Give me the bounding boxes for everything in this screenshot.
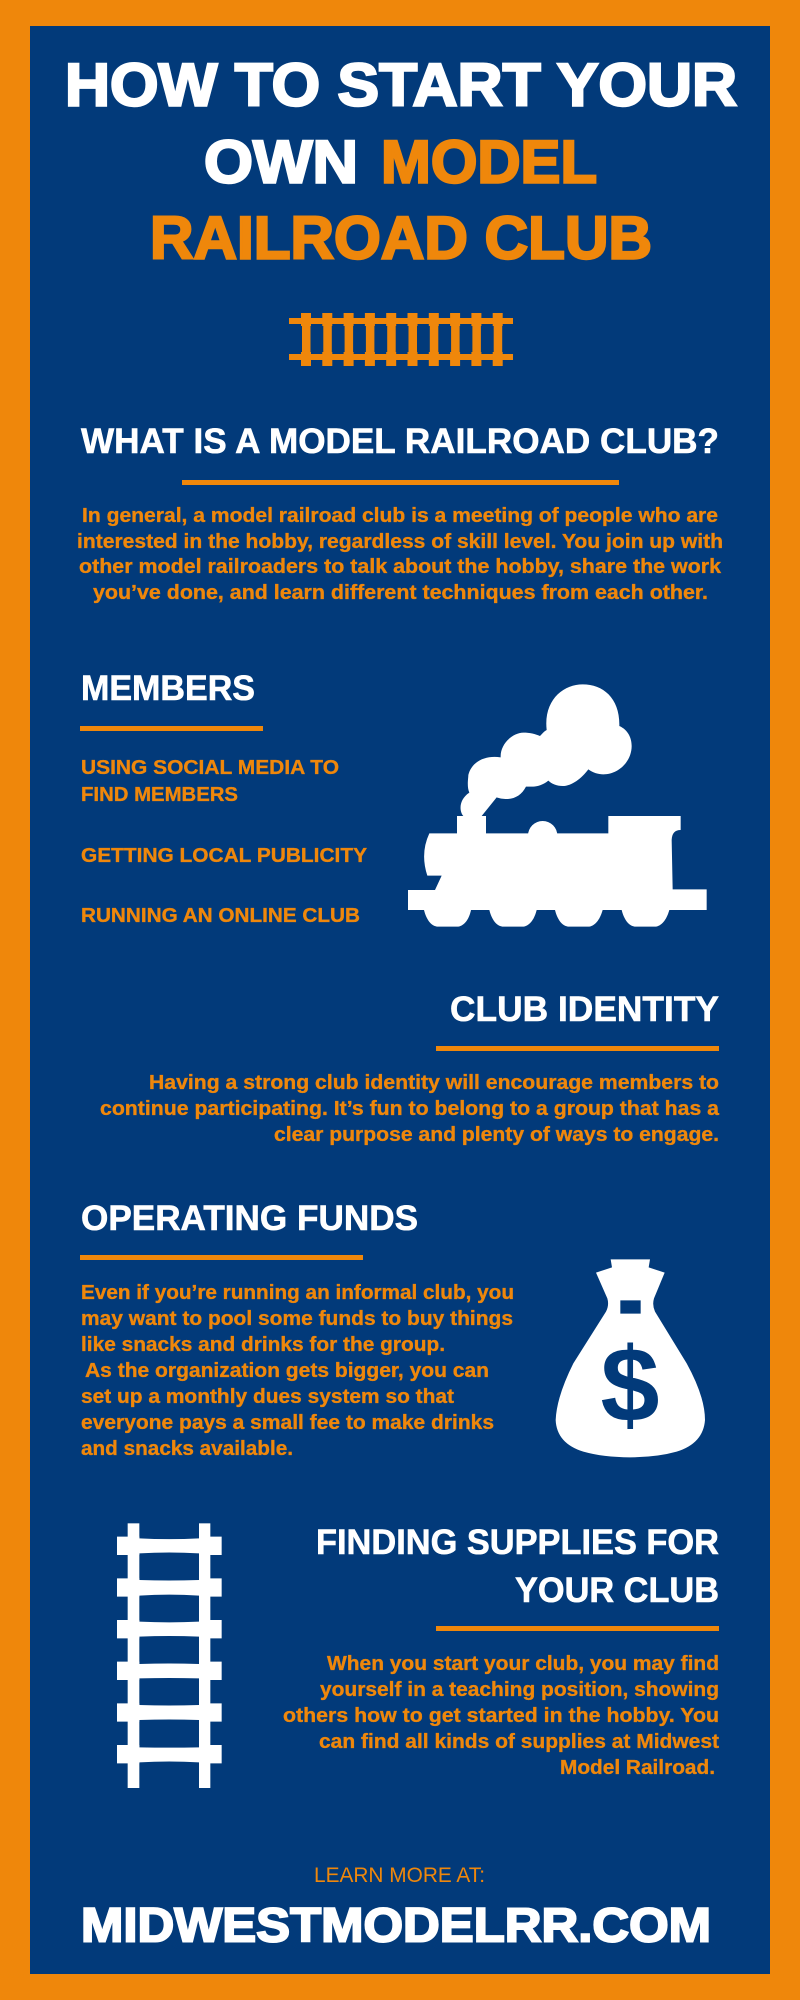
club identity paragraph: clear purpose and plenty of ways to engage. [274,1123,719,1146]
title: OWN [204,128,358,196]
heading: finding supplies for your club [316,1523,719,1610]
heading underline [436,1046,719,1051]
members list: RUNNING AN ONLINE CLUB [81,904,360,927]
operating funds paragraph [81,1281,514,1460]
intro paragraph: In general, a model railroad club is a meeting of people who are [82,504,718,527]
panel: members [80,669,367,927]
operating funds paragraph: and snacks available. [81,1437,293,1460]
finding supplies paragraph: yourself in a teaching position, showing [320,1678,719,1701]
icon: money bag [556,1259,705,1457]
operating funds paragraph: may want to pool some funds to buy things [81,1307,513,1330]
footer: learn more label: LEARN MORE AT: [314,1864,485,1887]
intro paragraph: other model railroaders to talk about the hobby, share the work [79,555,722,578]
panel: finding supplies [283,1523,719,1779]
icon: steam locomotive [408,684,707,927]
members list: FIND MEMBERS [81,783,238,806]
panel: club identity [100,990,720,1146]
heading: what is a model railroad club: WHAT IS A MODEL RAILROAD CLUB? [81,422,719,461]
title [65,52,737,272]
title: HOW TO START YOUR [65,52,737,118]
members list: USING SOCIAL MEDIA TO [81,756,339,779]
operating funds paragraph: like snacks and drinks for the group. [81,1333,445,1356]
heading: finding supplies for your club: FINDING SUPPLIES FOR [316,1523,719,1562]
heading: finding supplies for your club: YOUR CLUB [515,1571,719,1610]
heading underline [80,726,263,731]
operating funds paragraph: everyone pays a small fee to make drinks [81,1411,494,1434]
operating funds paragraph: set up a monthly dues system so that [81,1385,454,1408]
operating funds paragraph: Even if you’re running an informal club, you [81,1281,514,1304]
club identity paragraph: Having a strong club identity will encourage members to [149,1071,719,1094]
icon: horizontal railroad track [289,313,513,366]
operating funds paragraph: As the organization gets bigger, you can [85,1359,489,1382]
intro paragraph: interested in the hobby, regardless of skill level. You join up with [77,530,723,553]
title: MODEL [381,128,597,196]
finding supplies paragraph: When you start your club, you may find [327,1652,719,1675]
title: RAILROAD CLUB [150,204,652,272]
finding supplies paragraph [283,1652,719,1779]
panel: operating funds [80,1199,514,1460]
club identity paragraph: continue participating. It’s fun to belong to a group that has a [100,1097,720,1120]
icon: vertical railroad track [117,1523,222,1788]
heading: members: MEMBERS [81,669,255,708]
club identity paragraph [100,1071,720,1146]
heading underline [182,480,619,485]
footer: website url: MIDWESTMODELRR.COM [81,1900,711,1952]
panel: what is a model railroad club [77,422,723,604]
members list [81,756,367,927]
heading: operating funds: OPERATING FUNDS [81,1199,418,1238]
finding supplies paragraph: others how to get started in the hobby. You [283,1704,719,1727]
members list: GETTING LOCAL PUBLICITY [81,844,367,867]
heading: club identity: CLUB IDENTITY [450,990,719,1029]
finding supplies paragraph: Model Railroad. [560,1756,715,1779]
icon: money bag: $ [601,1326,659,1444]
intro paragraph [77,504,723,604]
heading underline [80,1255,363,1260]
intro paragraph: you’ve done, and learn different techniques from each other. [93,581,708,604]
finding supplies paragraph: can find all kinds of supplies at Midwest [319,1730,719,1753]
heading underline [436,1626,719,1631]
